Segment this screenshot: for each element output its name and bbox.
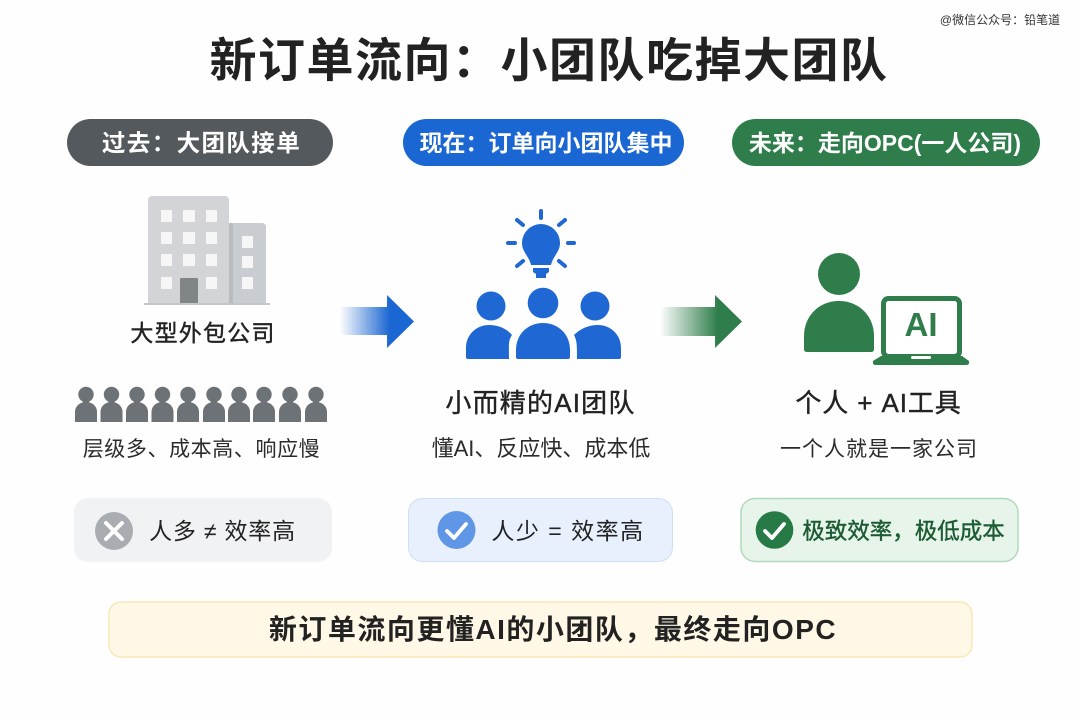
- icon: row of ten people: [75, 387, 327, 422]
- pill: past: 过去：大团队接单: [102, 130, 301, 156]
- icon: green check: [756, 511, 793, 549]
- callout: conclusion: 新订单流向更懂AI的小团队，最终走向OPC: [269, 614, 837, 645]
- panel: extreme efficiency, low cost: 极致效率，极低成本: [802, 519, 1005, 544]
- callout: conclusion: [109, 602, 972, 657]
- arrow: green: [660, 295, 742, 348]
- label: large outsourcing company: 大型外包公司: [130, 320, 276, 346]
- panel: fewer people is efficient: 人少 = 效率高: [491, 518, 645, 544]
- text: present benefits: 懂AI、反应快、成本低: [432, 436, 650, 461]
- panel: fewer people is efficient: [408, 498, 672, 562]
- icon: office building: [144, 196, 270, 305]
- panel: more people is not efficient: [74, 498, 332, 562]
- arrow: blue: [340, 295, 414, 348]
- pill: present: [403, 119, 684, 166]
- icon: light bulb: [508, 211, 574, 278]
- icon: cross: [95, 512, 133, 550]
- title: 新订单流向：小团队吃掉大团队: [210, 34, 888, 87]
- watermark: @微信公众号：铅笔道: [940, 12, 1060, 27]
- pill: future: 未来：走向OPC(一人公司): [749, 130, 1021, 156]
- panel: extreme efficiency, low cost: [741, 498, 1018, 562]
- icon: idea team: [466, 211, 621, 359]
- text: one person is one company: 一个人就是一家公司: [780, 438, 978, 461]
- label: individual plus AI tools: 个人 + AI工具: [795, 388, 962, 418]
- icon: blue check: [438, 511, 476, 549]
- icon: person with AI laptop: [804, 253, 969, 365]
- icon: person with AI laptop: AI: [904, 306, 938, 343]
- panel: more people is not efficient: 人多 ≠ 效率高: [149, 518, 296, 544]
- text: past drawbacks: 层级多、成本高、响应慢: [83, 438, 320, 461]
- pill: present: 现在：订单向小团队集中: [420, 130, 672, 156]
- pill: past: [67, 119, 333, 166]
- pill: future: [732, 119, 1040, 166]
- label: small elite AI team: 小而精的AI团队: [445, 388, 636, 418]
